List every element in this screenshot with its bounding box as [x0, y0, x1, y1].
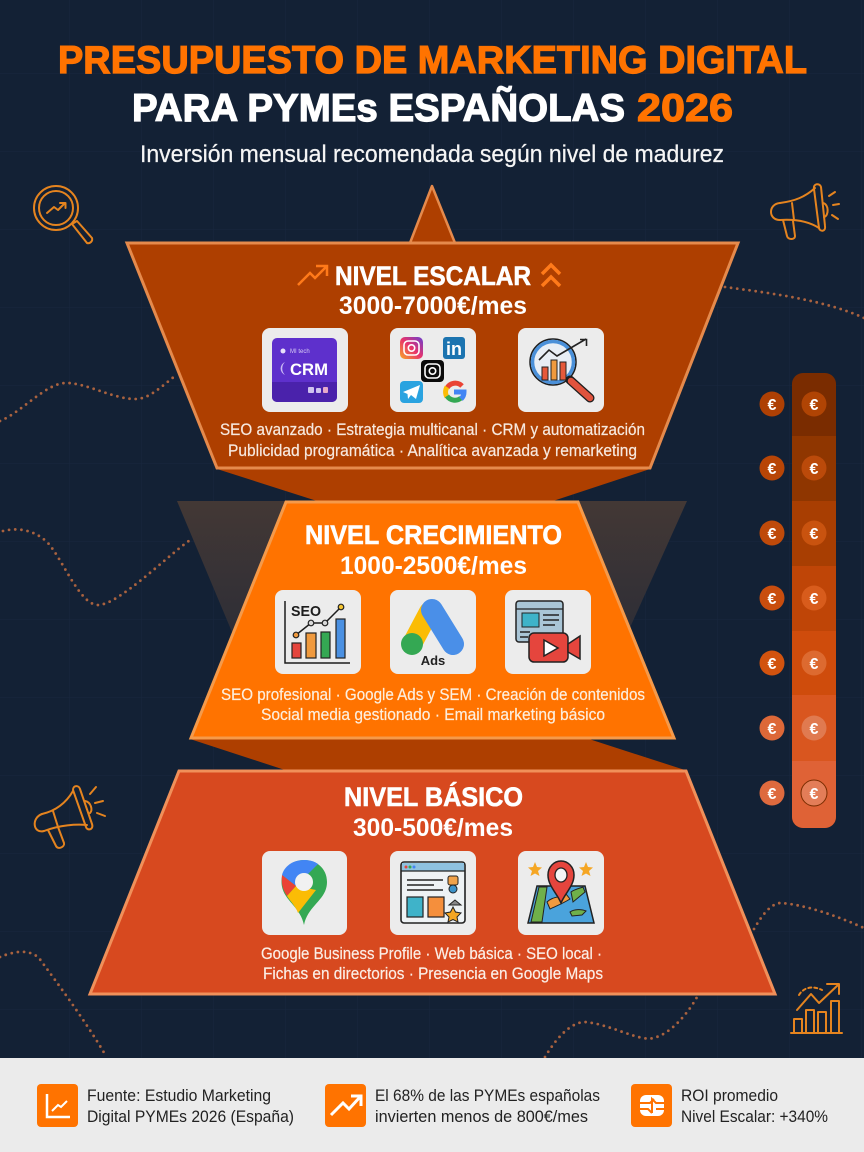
panel: nivel escalar — [127, 243, 738, 468]
icon tile: CRM — [262, 328, 348, 412]
pyramid connector: top to middle — [217, 469, 650, 501]
icon tile: video content — [505, 590, 591, 674]
icon tile: social networks — [390, 328, 476, 412]
description escalar line 1: SEO avanzado · Estrategia multicanal · CRM y automatización — [220, 421, 645, 439]
icon: growth chart bottom right — [791, 984, 842, 1033]
heading crecimiento: NIVEL CRECIMIENTO — [305, 520, 562, 550]
icon: magnifier with trend — [34, 186, 92, 243]
investment progress bar: € — [810, 656, 819, 673]
footer — [0, 1058, 864, 1152]
investment progress bar: € — [810, 721, 819, 738]
footer item: ROI: Nivel Escalar: +340% — [681, 1108, 828, 1126]
euro coin column left: € — [768, 591, 777, 608]
footer item: ROI: ROI promedio — [681, 1087, 778, 1105]
footer item: statistic — [325, 1084, 600, 1127]
description basico line 1: Google Business Profile · Web básica · SEO local · — [261, 945, 602, 963]
investment progress bar: € — [810, 461, 819, 478]
icon: megaphone left — [35, 786, 105, 848]
euro coin column left: € — [768, 397, 777, 414]
investment progress bar: € — [810, 397, 819, 414]
dotted trend lines — [0, 287, 864, 1057]
description basico line 2: Fichas en directorios · Presencia en Google Maps — [263, 965, 603, 983]
icon tile: Google Maps pin — [262, 851, 347, 935]
price escalar: 3000-7000€/mes — [339, 292, 527, 320]
euro coin column left: € — [768, 526, 777, 543]
panel shape crecimiento — [191, 502, 674, 738]
panel shape escalar — [127, 243, 738, 468]
footer item: source — [37, 1084, 294, 1127]
euro coin column left — [760, 392, 784, 806]
pyramid connector: apex — [410, 186, 455, 243]
euro coin column left: € — [768, 656, 777, 673]
icon tile: CRM: MI tech — [290, 349, 310, 355]
euro coin column left: € — [768, 461, 777, 478]
title line 1: PRESUPUESTO DE MARKETING DIGITAL — [58, 39, 807, 82]
panel: nivel crecimiento — [191, 502, 674, 738]
icon tile: CRM: CRM — [290, 360, 328, 379]
pyramid connector: middle to bottom — [190, 739, 688, 771]
title year: 2026 — [637, 87, 733, 130]
panel: nivel basico — [90, 771, 775, 994]
subtitle: Inversión mensual recomendada según nivel de madurez — [140, 141, 724, 168]
investment progress bar: € — [810, 591, 819, 608]
icon: trend arrow — [298, 266, 327, 285]
icon tile: social networks: in — [446, 339, 462, 359]
footer item: statistic: El 68% de las PYMEs españolas — [375, 1087, 600, 1105]
icon tile: SEO chart — [275, 590, 361, 674]
title — [58, 39, 807, 130]
icon: megaphone top right — [771, 184, 839, 239]
investment progress bar: € — [810, 526, 819, 543]
ghost trapezoid behind middle level — [177, 501, 687, 632]
footer item: statistic: invierten menos de 800€/mes — [375, 1108, 588, 1126]
description crecimiento line 2: Social media gestionado · Email marketing básico — [261, 706, 605, 724]
icon tile: basic website — [390, 851, 476, 935]
euro coin column left: € — [768, 786, 777, 803]
icon tile: local map — [518, 851, 604, 935]
investment progress bar: € — [810, 786, 819, 803]
icon tile: analytics magnifier — [518, 328, 604, 412]
price crecimiento: 1000-2500€/mes — [340, 552, 527, 580]
footer item: source: Fuente: Estudio Marketing — [87, 1087, 271, 1105]
icon: double chevron — [542, 265, 560, 286]
footer item: ROI — [631, 1084, 828, 1127]
icon tile: Google Ads: Ads — [421, 653, 445, 668]
icon tile: Google Ads — [390, 590, 476, 674]
investment progress bar — [792, 373, 836, 828]
heading escalar: NIVEL ESCALAR — [335, 261, 531, 291]
footer item: source: Digital PYMEs 2026 (España) — [87, 1108, 294, 1126]
panel shape basico — [90, 771, 775, 994]
heading basico: NIVEL BÁSICO — [344, 781, 523, 812]
price basico: 300-500€/mes — [353, 814, 513, 842]
title line 2: PARA PYMEs ESPAÑOLAS — [132, 86, 625, 130]
description crecimiento line 1: SEO profesional · Google Ads y SEM · Creación de contenidos — [221, 686, 645, 704]
icon tile: SEO chart: SEO — [291, 603, 321, 620]
euro coin column left: € — [768, 721, 777, 738]
description escalar line 2: Publicidad programática · Analítica avanzada y remarketing — [228, 442, 637, 460]
